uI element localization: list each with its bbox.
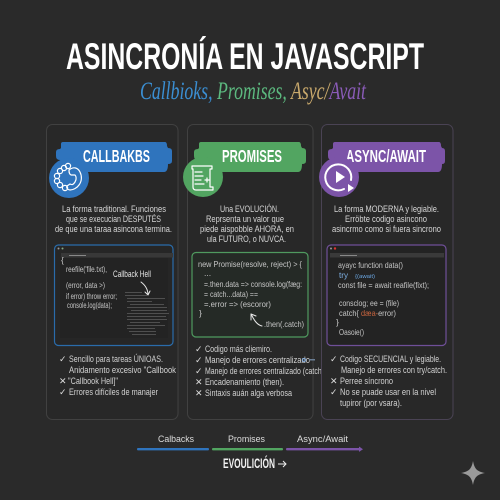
code window: async function: {(await)	[355, 274, 375, 280]
list: promises: ✓	[195, 366, 203, 376]
list: promises	[195, 344, 324, 398]
list: promises: Sintaxis auán alga verbosa	[205, 388, 292, 398]
list: async await: tupiror (por vsara).	[340, 398, 402, 408]
nested code block	[125, 292, 169, 335]
list: async await: Manejo de errores con try/catch.	[341, 365, 447, 375]
code window: callback hell: (error, data >)	[66, 280, 105, 290]
subtitle: Callbioks, Promises, Asyc/Avait	[140, 78, 367, 105]
description: async await: Erröbte codigo asincono	[345, 214, 427, 224]
timeline: evolution: Async/Await	[297, 434, 349, 444]
description: callbacks: La forma traditional. Funciones	[62, 204, 166, 214]
code window: callback hell: if error) throw error;	[66, 291, 117, 301]
panel: callbacks	[46, 124, 178, 420]
banner: promises: PROMISES	[222, 146, 282, 166]
banner: callbacks: CALLBAKBS	[83, 146, 150, 166]
code window: promise chain: ...	[204, 268, 211, 278]
list: promises: Encadenamiento (then).	[205, 377, 284, 387]
icon: sparkle	[461, 461, 485, 485]
code window: promise chain: .then(.catch)	[264, 319, 304, 329]
code window: async function: Oasoie()	[339, 327, 364, 337]
description: callbacks: de que una taraa asincona termina.	[55, 224, 172, 234]
code window: async function: }	[336, 317, 339, 327]
list: async await: ✓	[330, 354, 338, 364]
code window: async function: ayayc function data()	[338, 260, 403, 270]
list: promises: Codigo más cliemiro.	[205, 344, 272, 354]
timeline: evolution	[137, 434, 363, 471]
list: promises: ✓	[195, 355, 203, 365]
banner: promises	[194, 142, 306, 172]
timeline: evolution: Promises	[228, 434, 265, 444]
code window: promise chain: = catch...data) ==	[204, 289, 258, 299]
list: promises: ✕	[195, 388, 203, 398]
code window: promise chain: =.then.data => console.log(fæg:	[204, 279, 302, 289]
arrow: callback hell	[141, 282, 150, 295]
description: promises: Una EVOLUCIÓN.	[220, 204, 279, 214]
panel: async await	[319, 124, 453, 420]
code window: promise chain	[192, 252, 308, 337]
list: callbacks: "Callbook Hell]"	[68, 376, 118, 386]
list: callbacks	[59, 354, 176, 397]
description: async await: asincrmo como si fuera sincrono	[332, 224, 441, 234]
code window: callback hell: console.log(data);	[67, 300, 112, 310]
description: promises	[200, 204, 294, 244]
icon: play cycle	[319, 157, 359, 197]
description: async await: La forma MODERNA y legiable.	[334, 204, 439, 214]
icon: scroll	[183, 157, 223, 197]
list: callbacks: Sencillo para tareas ÚNIOAS.	[69, 354, 163, 364]
banner: async await: ASYNC/AWAIT	[346, 146, 426, 166]
list: promises: ✕	[195, 377, 203, 387]
code window: async function: try	[339, 270, 349, 280]
description: callbacks	[55, 204, 172, 234]
list: promises: ✓	[195, 344, 203, 354]
code window: promise chain: new Promise(resolve, reject) > {	[198, 259, 302, 269]
code window: async function: catch{ dæa-error)	[339, 308, 396, 318]
list: callbacks: ✓	[59, 387, 67, 397]
list: promises: Manejo de errores centralizado (catch)	[205, 366, 324, 376]
description: async await	[332, 204, 441, 234]
timeline: evolution: Calbacks	[158, 434, 194, 444]
list: async await: No se puade usar en la nivel	[340, 387, 436, 397]
list: async await	[330, 354, 447, 408]
description: callbacks: que se execucian DESPUTÉS	[66, 214, 161, 224]
description: promises: piede aispobble AHORA, en	[200, 224, 294, 234]
code window: callback hell: {	[61, 255, 64, 265]
panel: promises	[183, 124, 324, 420]
code window: promise chain: =.error => (escoror)	[204, 299, 271, 309]
code window: promise chain: }	[199, 308, 202, 318]
list: callbacks: ✓	[59, 354, 67, 364]
list: async await: ✓	[330, 387, 338, 397]
list: callbacks: Errores difíciles de manajer	[69, 387, 158, 397]
list: async await: Codigo SECUENCIAL y legiable.	[340, 354, 441, 364]
code window: async function: const file = await reafile(fixt);	[338, 280, 429, 290]
description: promises: Reprsenta un valor que	[206, 214, 284, 224]
list: callbacks: Anidamento excesivo "Callbook	[69, 365, 176, 375]
icon: phone and chain	[49, 158, 89, 198]
banner: async await	[328, 142, 445, 172]
timeline: evolution: EVOULICIÓN	[223, 454, 275, 471]
list: async await: ✕	[330, 376, 338, 386]
list: async await: Perree síncrono	[340, 376, 393, 386]
callout: callback hell: Callback Hell	[113, 269, 151, 280]
code window: async function: consclog; ee = (file)	[339, 298, 399, 308]
banner: callbacks	[56, 142, 172, 172]
list: promises: Manejo de errores centralizado	[205, 355, 310, 365]
code window: callback hell: reefile('file.txt),	[66, 264, 107, 274]
description: promises: ula FUTURO, o NUVCA.	[207, 234, 286, 244]
arrow: then catch	[251, 314, 262, 326]
list: callbacks: ✕	[59, 376, 67, 386]
code window: callback hell	[54, 245, 173, 346]
code window: async function	[327, 245, 446, 346]
